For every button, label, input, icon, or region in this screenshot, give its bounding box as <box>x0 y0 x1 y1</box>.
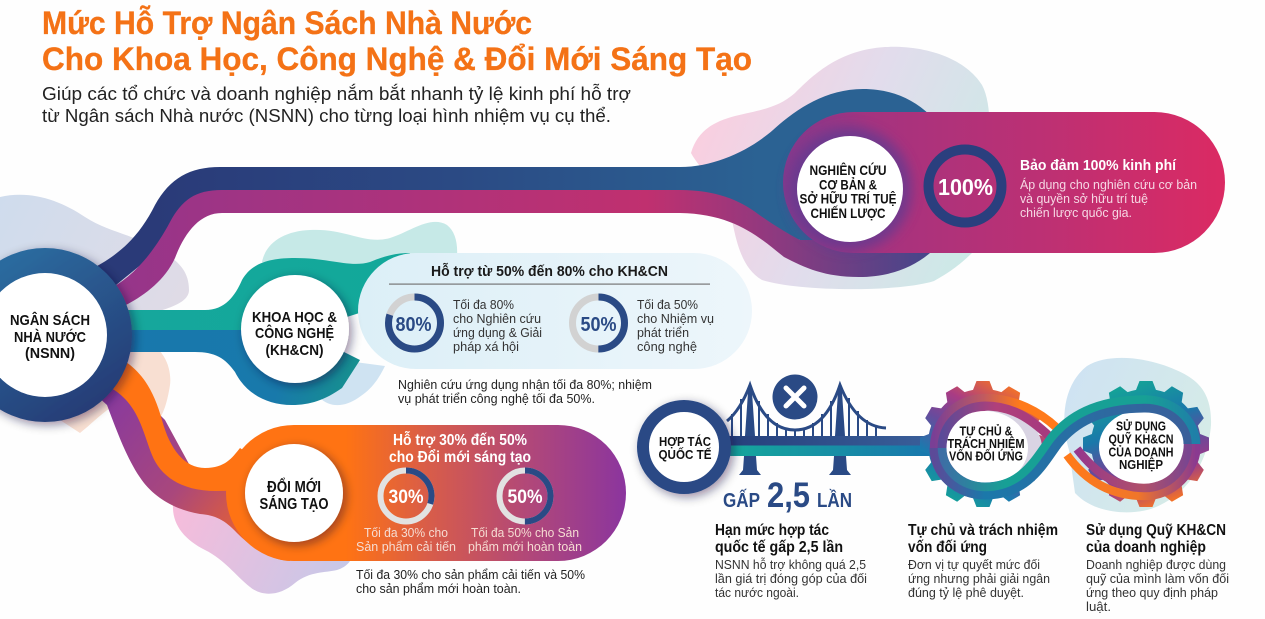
orange branch to innovation <box>105 362 300 491</box>
text 50%: công nghệ <box>637 339 697 354</box>
text block: company fund: ứng theo quy định pháp <box>1086 585 1218 600</box>
callout: 2.5x <box>723 476 852 515</box>
node: innovation: ĐỔI MỚI <box>267 477 321 496</box>
node: KH&CN <box>241 275 349 383</box>
donut 30%: 30% <box>388 487 424 508</box>
node: KH&CN: KHOA HỌC & <box>252 309 337 326</box>
donut captions: Sản phẩm cải tiến <box>356 539 456 554</box>
label: company fund <box>1108 418 1174 472</box>
text: 100% funding <box>1020 157 1197 220</box>
text: 100% funding: chiến lược quốc gia. <box>1020 205 1132 220</box>
text block: international cooperation <box>715 522 867 600</box>
donut 50% <box>500 470 550 522</box>
subtitle: Giúp các tổ chức và doanh nghiệp nắm bắt nhanh tỷ lệ kinh phí hỗ trợ <box>42 83 631 104</box>
node: innovation: SÁNG TẠO <box>260 494 328 513</box>
text block: international cooperation: lần giá trị đóng góp của đối <box>715 571 867 586</box>
donut captions <box>356 525 582 554</box>
label: company fund: CỦA DOANH <box>1108 444 1174 460</box>
label: company fund: NGHIỆP <box>1119 457 1163 472</box>
node: KH&CN: CÔNG NGHỆ <box>255 324 334 342</box>
100% ring: 100% <box>938 174 993 200</box>
infinity band: orange and purple lower arc <box>1067 444 1196 496</box>
title <box>42 5 752 77</box>
label: self-reliance: TỰ CHỦ & <box>960 424 1012 438</box>
infinity band: teal and blue S-curve <box>938 400 1196 491</box>
text block: company fund: Sử dụng Quỹ KH&CN <box>1086 522 1226 539</box>
bridge road <box>725 436 935 456</box>
bridge suspenders <box>732 398 876 436</box>
text 50%: cho Nhiệm vụ <box>637 311 714 326</box>
node: international cooperation: HỢP TÁC <box>659 434 712 449</box>
donut 80%: 80% <box>396 314 432 336</box>
text 80%: cho Nghiên cứu <box>453 311 541 326</box>
navy branch to basic research <box>85 89 930 290</box>
node: basic research: NGHIÊN CỨU <box>810 163 886 178</box>
text block: self-reliance: Tự chủ và trách nhiệm <box>908 522 1058 539</box>
text block: self-reliance: đúng tỷ lệ phê duyệt. <box>908 585 1024 600</box>
text block: company fund: luật. <box>1086 599 1111 614</box>
node: NSNN root: (NSNN) <box>25 345 75 362</box>
donut 50%: 50% <box>508 487 543 508</box>
node: NSNN root: NGÂN SÁCH <box>10 311 90 329</box>
white centre: self-reliance <box>942 410 1042 486</box>
donut captions: phẩm mới hoàn toàn <box>468 539 582 554</box>
bridge piers <box>739 456 851 475</box>
decorative blob: peach <box>60 340 170 433</box>
node: innovation <box>245 444 343 542</box>
text 50%: Tối đa 50% <box>637 297 698 312</box>
text: innovation note <box>356 567 585 596</box>
donut captions: Tối đa 50% cho Sản <box>471 525 579 540</box>
text block: self-reliance: ứng nhưng phải giải ngân <box>908 571 1050 586</box>
title: Cho Khoa Học, Công Nghệ & Đổi Mới Sáng Tạo <box>42 41 752 77</box>
text block: company fund <box>1086 522 1229 614</box>
label: self-reliance: VỐN ĐỐI ỨNG <box>949 448 1023 464</box>
text: KH&CN note: Nghiên cứu ứng dụng nhận tối đa 80%; nhiệm <box>398 377 652 392</box>
decorative blob: behind right gear <box>1064 358 1211 512</box>
text block: self-reliance: Đơn vị tự quyết mức đối <box>908 557 1040 572</box>
text: KH&CN note: vụ phát triển công nghệ tối đa 50%. <box>398 391 595 406</box>
node: basic research: CHIẾN LƯỢC <box>810 206 886 221</box>
panel: innovation capsule <box>226 425 626 561</box>
node: KH&CN: (KH&CN) <box>266 342 324 359</box>
node: basic research <box>797 136 903 242</box>
panel: basic research capsule <box>783 112 1225 253</box>
blue branch to KH&CN <box>115 330 360 405</box>
bridge towers <box>745 385 845 436</box>
donut 30% <box>380 470 432 522</box>
text 80%: ứng dụng & Giải <box>453 325 542 340</box>
text block: international cooperation: Hạn mức hợp tác <box>715 522 829 539</box>
text block: company fund: của doanh nghiệp <box>1086 539 1206 556</box>
white centre: company fund <box>1099 410 1185 484</box>
decorative blob: blue under KH&CN panel <box>320 360 385 405</box>
text: 100% funding: Áp dụng cho nghiên cứu cơ bản <box>1020 177 1197 192</box>
text: innovation note: Tối đa 30% cho sản phẩm cải tiến và 50% <box>356 567 585 582</box>
node: international cooperation <box>643 406 725 488</box>
text block: international cooperation: quốc tế gấp 2,5 lần <box>715 539 843 556</box>
label: company fund: QUỸ KH&CN <box>1108 432 1174 446</box>
text: KH&CN note <box>398 377 652 406</box>
label: company fund: SỬ DỤNG <box>1116 418 1166 434</box>
text: 100% funding: Bảo đảm 100% kinh phí <box>1020 157 1177 174</box>
text: 100% funding: và quyền sở hữu trí tuệ <box>1020 191 1148 206</box>
text 50%: phát triển <box>637 325 689 340</box>
bridge illustration <box>725 385 935 475</box>
callout: 2.5x: LẦN <box>817 489 852 512</box>
subtitle <box>42 83 631 126</box>
magenta branch to basic research <box>105 190 930 310</box>
100% ring <box>928 150 1002 222</box>
icon: cross circle <box>772 374 818 420</box>
callout: 2.5x: GẤP <box>723 489 760 512</box>
donut 80% <box>388 297 440 349</box>
text 50% <box>637 297 714 354</box>
node: NSNN root: NHÀ NƯỚC <box>14 328 86 346</box>
node: NSNN root <box>0 248 132 422</box>
text block: company fund: Doanh nghiệp được dùng <box>1086 557 1226 572</box>
label: self-reliance <box>948 424 1024 464</box>
text block: self-reliance <box>908 522 1058 600</box>
donut captions: Tối đa 30% cho <box>364 525 448 540</box>
donut 50%: 50% <box>580 314 617 336</box>
gear: self-reliance <box>919 380 1047 508</box>
text block: self-reliance: vốn đối ứng <box>908 539 987 556</box>
panel: KH&CN <box>358 253 752 369</box>
panel: KH&CN: Hỗ trợ từ 50% đến 80% cho KH&CN <box>431 263 668 280</box>
decorative blob: pink under innovation panel <box>173 500 352 594</box>
text 80%: pháp xá hội <box>453 339 519 354</box>
gear: company fund <box>1082 380 1210 508</box>
node: basic research: SỞ HỮU TRÍ TUỆ <box>800 192 896 206</box>
subtitle: từ Ngân sách Nhà nước (NSNN) cho từng loại hình nhiệm vụ cụ thể. <box>42 105 611 126</box>
text 80% <box>453 297 542 354</box>
title: Mức Hỗ Trợ Ngân Sách Nhà Nước <box>42 5 532 41</box>
decorative blob: mint behind KH&CN <box>262 222 457 300</box>
bridge main cable <box>727 385 886 430</box>
decorative blob: top right <box>691 47 990 289</box>
infinity band: orange and magenta upper arc <box>934 398 1057 448</box>
text: innovation note: cho sản phẩm mới hoàn toàn. <box>356 581 521 596</box>
panel: innovation capsule: Hỗ trợ 30% đến 50% <box>393 432 527 449</box>
text block: international cooperation: tác nước ngoài. <box>715 585 799 600</box>
text block: company fund: quỹ của mình làm vốn đối <box>1086 571 1229 586</box>
callout: 2.5x: 2,5 <box>767 476 810 515</box>
node: basic research: CƠ BẢN & <box>819 178 877 192</box>
teal branch to KH&CN <box>115 253 410 332</box>
text 80%: Tối đa 80% <box>453 297 514 312</box>
purple branch to innovation <box>85 385 290 561</box>
label: self-reliance: TRÁCH NHIỆM <box>948 436 1024 451</box>
text block: international cooperation: NSNN hỗ trợ không quá 2,5 <box>715 557 866 572</box>
donut 50% <box>572 297 624 349</box>
decorative blob: left centre <box>0 195 189 340</box>
panel: innovation capsule: cho Đổi mới sáng tạo <box>389 449 531 466</box>
node: international cooperation: QUỐC TẾ <box>658 447 712 462</box>
